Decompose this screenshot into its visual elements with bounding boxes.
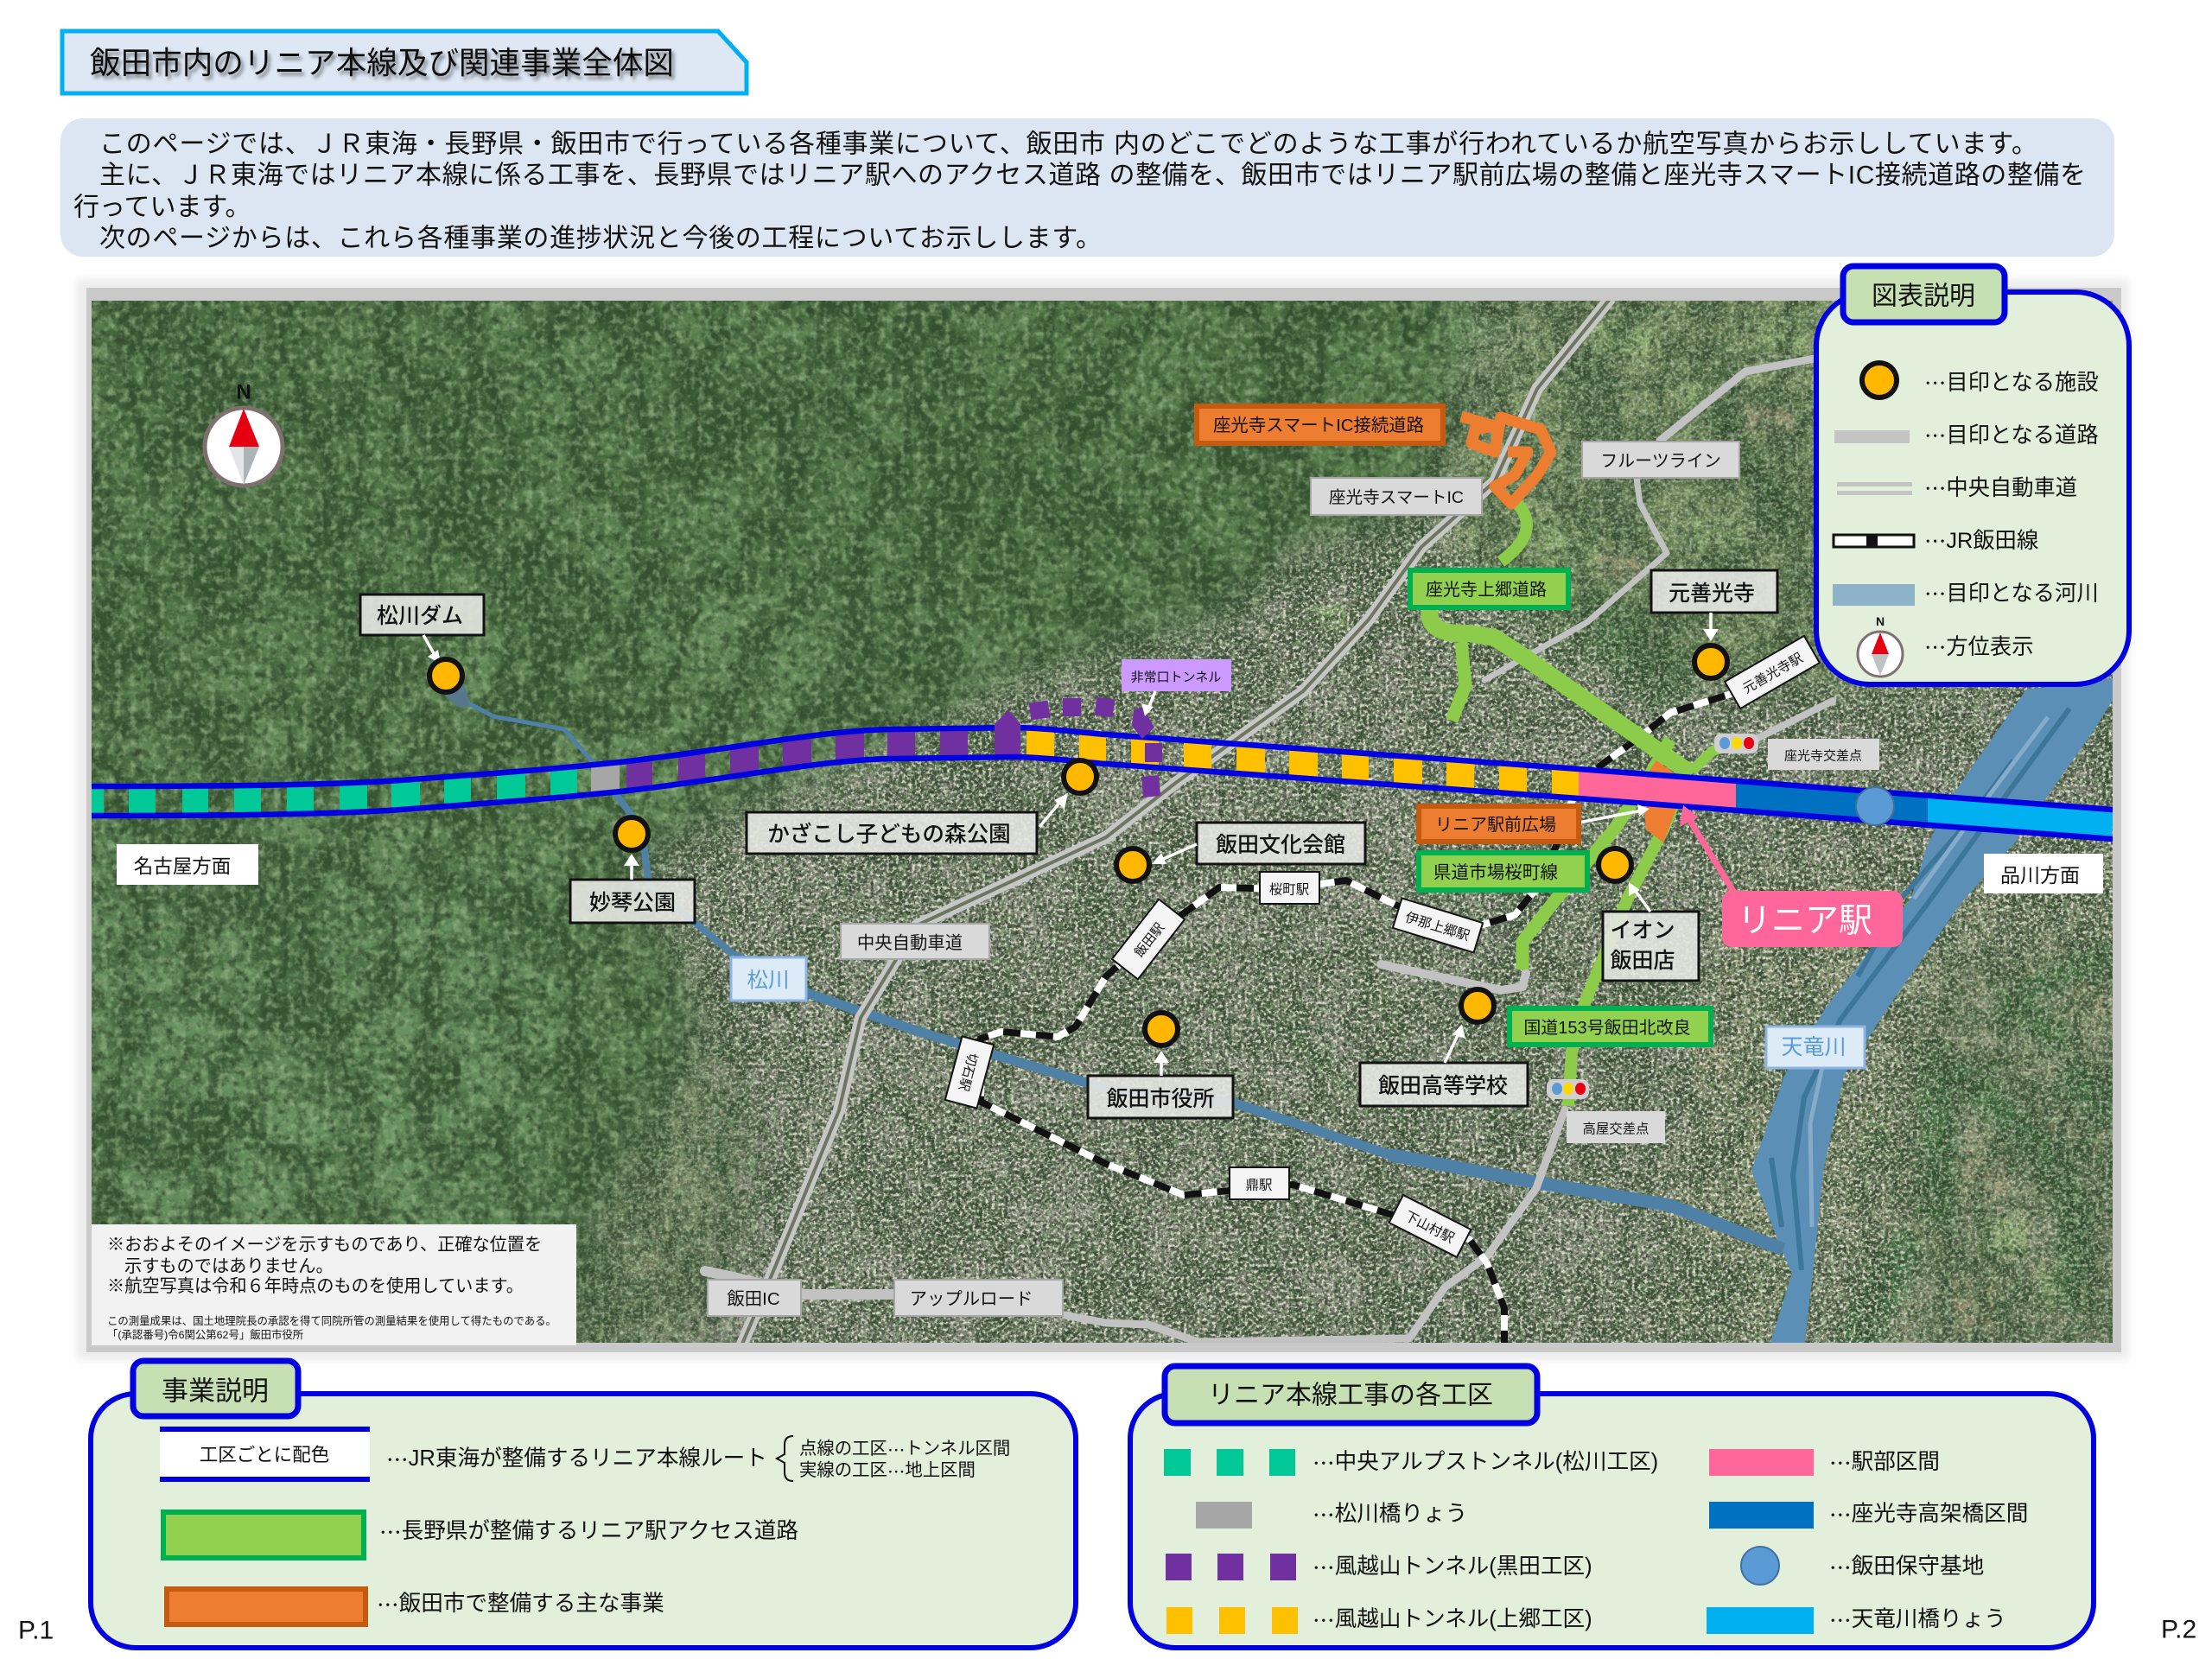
legend: Zakoji viaduct: …座光寺高架橋区間 bbox=[1829, 1498, 2028, 1529]
label: Zakoji smart IC connector road bbox=[1197, 406, 1443, 443]
station: Shimoyamamura: 下山村駅 bbox=[1402, 1208, 1457, 1246]
label: Fruit line bbox=[1582, 442, 1739, 478]
legend item: landmark road: …目印となる道路 bbox=[1924, 420, 2099, 451]
station: Kanae: 鼎駅 bbox=[1246, 1177, 1272, 1192]
landmark: Myokin park bbox=[570, 815, 695, 923]
panel: project explanation bbox=[91, 1361, 1076, 1648]
legend item: compass: …方位表示 bbox=[1924, 632, 2034, 663]
swatch: Iida city project bbox=[167, 1589, 365, 1624]
label: Tenryu river bbox=[1766, 1027, 1865, 1068]
dam reservoir bbox=[430, 658, 468, 708]
legend: Kazakoshiyama tunnel Kuroda bbox=[1166, 1550, 1592, 1583]
landmark: Iida high school: 飯田高等学校 bbox=[1378, 1074, 1508, 1098]
river: Tenryu bbox=[1751, 678, 2113, 1348]
label: Zakoji smart IC bbox=[1311, 478, 1482, 515]
label: Zakoji intersection: 座光寺交差点 bbox=[1784, 748, 1862, 764]
label: Fruit line: フルーツライン bbox=[1600, 452, 1721, 471]
label: Iida IC: 飯田IC bbox=[727, 1289, 780, 1309]
note box: ※おおよそのイメージを示すものであり、正確な位置を bbox=[107, 1235, 542, 1255]
legend: maintenance base: …飯田保守基地 bbox=[1829, 1550, 1984, 1583]
label: Zakoji intersection bbox=[1768, 739, 1879, 770]
intro text block: このページでは、ＪＲ東海・長野県・飯田市で行っている各種事業について、飯田市 内のどこでどのような工事が行われているか航空写真からお示ししています。 bbox=[99, 130, 2037, 159]
landmark: Kazakoshi children's forest park: かざこし子どもの森公園 bbox=[767, 821, 1011, 847]
legend item: JR Iida line: …JR飯田線 bbox=[1924, 525, 2038, 556]
station: Kiriishi bbox=[945, 1036, 994, 1109]
text: Iida city project: …飯田市で整備する主な事業 bbox=[377, 1588, 664, 1619]
aerial photo map bbox=[92, 301, 2113, 1343]
label: station plaza bbox=[1419, 804, 1649, 842]
label: Chuo expressway bbox=[841, 924, 989, 959]
sections tab: リニア本線工事の各工区 bbox=[1208, 1381, 1493, 1410]
page number P.1: P.1 bbox=[18, 1616, 54, 1645]
legend: Central Alps tunnel bbox=[1164, 1446, 1658, 1478]
access roads (green) bbox=[1430, 504, 1741, 1106]
title: 飯田市内のリニア本線及び関連事業全体図 bbox=[90, 46, 674, 80]
station: Iida: 飯田駅 bbox=[1132, 920, 1167, 960]
station: Iida bbox=[1112, 899, 1185, 979]
legend item: expressway bbox=[1837, 473, 2077, 504]
direction: Shinagawa: 品川方面 bbox=[2000, 864, 2080, 887]
landmark: Matsukawa dam bbox=[360, 594, 484, 695]
legend: Matsukawa bridge bbox=[1196, 1498, 1467, 1529]
traffic signal: Zakoji bbox=[1714, 734, 1758, 753]
compass on map: N bbox=[236, 380, 251, 404]
landmark: Iida city hall: 飯田市役所 bbox=[1106, 1087, 1215, 1111]
station: Shimoyamamura bbox=[1389, 1195, 1471, 1257]
page number P.2: P.2 bbox=[2161, 1616, 2196, 1643]
landmark: Aeon Iida: 飯田店 bbox=[1610, 949, 1675, 973]
landmark: Aeon Iida: イオン bbox=[1610, 918, 1675, 943]
legend item: compass bbox=[1858, 614, 2034, 677]
label: Chuo expressway: 中央自動車道 bbox=[857, 933, 963, 953]
label: emergency tunnel bbox=[1122, 659, 1231, 716]
legend: Central Alps tunnel: …中央アルプストンネル(松川工区) bbox=[1313, 1446, 1658, 1478]
landmark: Iida high school bbox=[1360, 987, 1528, 1106]
station: Motozenkoji bbox=[1725, 636, 1820, 709]
legend tab: 図表説明 bbox=[1872, 282, 1975, 311]
brace and section notes: 点線の工区…トンネル区間 bbox=[799, 1436, 1010, 1462]
label: station plaza: リニア駅前広場 bbox=[1435, 815, 1556, 835]
legend: Kazakoshiyama tunnel Kamisato bbox=[1166, 1604, 1592, 1635]
landmark: Aeon Iida bbox=[1596, 846, 1699, 981]
legend: maintenance base bbox=[1741, 1547, 1984, 1585]
direction: Nagoya: 名古屋方面 bbox=[134, 855, 231, 878]
brace and section notes bbox=[777, 1436, 1010, 1484]
label: prefectural road Ichiba-Sakuramachi bbox=[1419, 853, 1587, 890]
station: Inakamisato: 伊那上郷駅 bbox=[1403, 910, 1471, 944]
Iida maintenance base bbox=[1856, 787, 1894, 825]
callout: Linear station: リニア駅 bbox=[1738, 902, 1872, 940]
label: emergency tunnel: 非常口トンネル bbox=[1131, 671, 1221, 684]
panel: construction sections bbox=[1130, 1366, 2094, 1648]
direction: Shinagawa bbox=[1984, 854, 2103, 893]
station: Sakuramachi bbox=[1260, 872, 1319, 904]
label: Tenryu river: 天竜川 bbox=[1781, 1035, 1847, 1059]
swatch: JR Central route: 工区ごとに配色 bbox=[200, 1445, 329, 1465]
landmark: Iida cultural hall bbox=[1114, 823, 1365, 884]
title bbox=[62, 31, 747, 93]
legend item: JR Iida line bbox=[1834, 525, 2038, 556]
note box bbox=[92, 1224, 576, 1345]
callout: Linear station bbox=[1680, 805, 1903, 947]
intro text block: 行っています。 bbox=[73, 194, 251, 221]
swatch: Nagano prefecture access road bbox=[163, 1512, 364, 1558]
emergency exit tunnel (purple dashed) bbox=[995, 697, 1162, 798]
legend item: compass: N bbox=[1876, 614, 1885, 628]
label: route 153 bbox=[1510, 1008, 1711, 1045]
landmark: Iida cultural hall: 飯田文化会館 bbox=[1216, 833, 1345, 857]
label: Zakoji Kamisato road bbox=[1410, 570, 1568, 607]
sections tab bbox=[1165, 1366, 1537, 1423]
landmark: Kazakoshi children's forest park bbox=[747, 758, 1099, 854]
gray roads bbox=[705, 359, 1833, 1342]
legend: Zakoji viaduct bbox=[1709, 1498, 2028, 1529]
station: Kanae bbox=[1230, 1167, 1289, 1199]
note box: ※航空写真は令和６年時点のものを使用しています。 bbox=[107, 1276, 524, 1296]
label: Apple road bbox=[894, 1280, 1063, 1316]
intro text block bbox=[60, 118, 2114, 257]
text: Nagano prefecture access road: …長野県が整備するリニア駅アクセス道路 bbox=[379, 1516, 798, 1547]
compass on map bbox=[205, 380, 283, 486]
legend tab bbox=[1843, 266, 2005, 322]
legend: Kazakoshiyama tunnel Kamisato: …風越山トンネル(上郷工区) bbox=[1313, 1604, 1592, 1635]
station: Inakamisato bbox=[1393, 898, 1483, 953]
landmark: Iida city hall bbox=[1088, 1010, 1233, 1118]
legend: Kazakoshiyama tunnel Kuroda: …風越山トンネル(黒田工区) bbox=[1313, 1550, 1592, 1583]
legend: Matsukawa bridge: …松川橋りょう bbox=[1313, 1498, 1467, 1529]
label: Matsukawa river bbox=[731, 957, 806, 1001]
legend: Tenryu bridge bbox=[1707, 1604, 2006, 1635]
station: Kiriishi: 切石駅 bbox=[956, 1052, 980, 1092]
landmark: Motozenkoji: 元善光寺 bbox=[1669, 582, 1755, 606]
legend: station section bbox=[1709, 1446, 1940, 1478]
map frame bbox=[76, 279, 2129, 1360]
legend item: river bbox=[1833, 578, 2099, 609]
label: Takaya intersection bbox=[1567, 1111, 1665, 1143]
traffic signal: Takaya bbox=[1547, 1079, 1589, 1099]
station: Sakuramachi: 桜町駅 bbox=[1269, 881, 1309, 897]
landmark: Motozenkoji bbox=[1651, 570, 1777, 681]
legend item: landmark road bbox=[1834, 420, 2099, 451]
farm field patches bbox=[1313, 311, 2113, 1331]
label: Zakoji Kamisato road: 座光寺上郷道路 bbox=[1426, 580, 1547, 600]
panel: map legend bbox=[1816, 266, 2129, 684]
note box: 示すものではありません。 bbox=[124, 1257, 334, 1276]
intro text block: 主に、ＪＲ東海ではリニア本線に係る工事を、長野県ではリニア駅へのアクセス道路 の整備を、飯田市ではリニア駅前広場の整備と座光寺スマートIC接続道路の整備を bbox=[99, 161, 2086, 190]
expressway bbox=[741, 298, 1611, 1348]
river: Matsukawa bbox=[454, 696, 1783, 1249]
intro text block: 次のページからは、これら各種事業の進捗状況と今後の工程についてお示しします。 bbox=[99, 225, 1102, 252]
station: Motozenkoji: 元善光寺駅 bbox=[1740, 650, 1806, 696]
legend: station section: …駅部区間 bbox=[1829, 1446, 1940, 1478]
legend item: river: …目印となる河川 bbox=[1924, 578, 2099, 609]
note box: この測量成果は、国土地理院長の承認を得て同院所管の測量結果を使用して得たものである。 bbox=[107, 1314, 556, 1327]
note box: 「(承認番号)令6関公第62号」飯田市役所 bbox=[107, 1328, 303, 1341]
legend: Tenryu bridge: …天竜川橋りょう bbox=[1829, 1604, 2006, 1635]
landmark: Matsukawa dam: 松川ダム bbox=[377, 604, 463, 628]
label: Takaya intersection: 高屋交差点 bbox=[1583, 1122, 1649, 1137]
label: Zakoji smart IC: 座光寺スマートIC bbox=[1329, 488, 1464, 507]
landmark: Myokin park: 妙琴公園 bbox=[589, 891, 676, 915]
project tab bbox=[133, 1361, 298, 1416]
legend item: landmark facility: …目印となる施設 bbox=[1924, 367, 2099, 398]
brace and section notes: 実線の工区…地上区間 bbox=[799, 1458, 976, 1484]
direction: Nagoya bbox=[117, 844, 258, 885]
label: Zakoji smart IC connector road: 座光寺スマートIC接続道路 bbox=[1213, 416, 1424, 435]
Linear main line route bbox=[92, 728, 2113, 839]
label: Iida IC bbox=[708, 1280, 801, 1316]
label: prefectural road Ichiba-Sakuramachi: 県道市場桜町線 bbox=[1433, 862, 1558, 883]
project tab: 事業説明 bbox=[162, 1376, 269, 1407]
label: Matsukawa river: 松川 bbox=[747, 968, 790, 992]
legend item: expressway: …中央自動車道 bbox=[1924, 473, 2077, 504]
text: JR Central route: …JR東海が整備するリニア本線ルート bbox=[386, 1443, 767, 1474]
label: route 153: 国道153号飯田北改良 bbox=[1523, 1018, 1691, 1038]
smart IC road and station plaza (orange) bbox=[1461, 416, 1687, 842]
swatch: JR Central route bbox=[160, 1427, 370, 1482]
label: Apple road: アップルロード bbox=[910, 1290, 1033, 1309]
JR Iida line bbox=[981, 693, 1734, 1348]
legend item: landmark facility bbox=[1859, 360, 2099, 400]
